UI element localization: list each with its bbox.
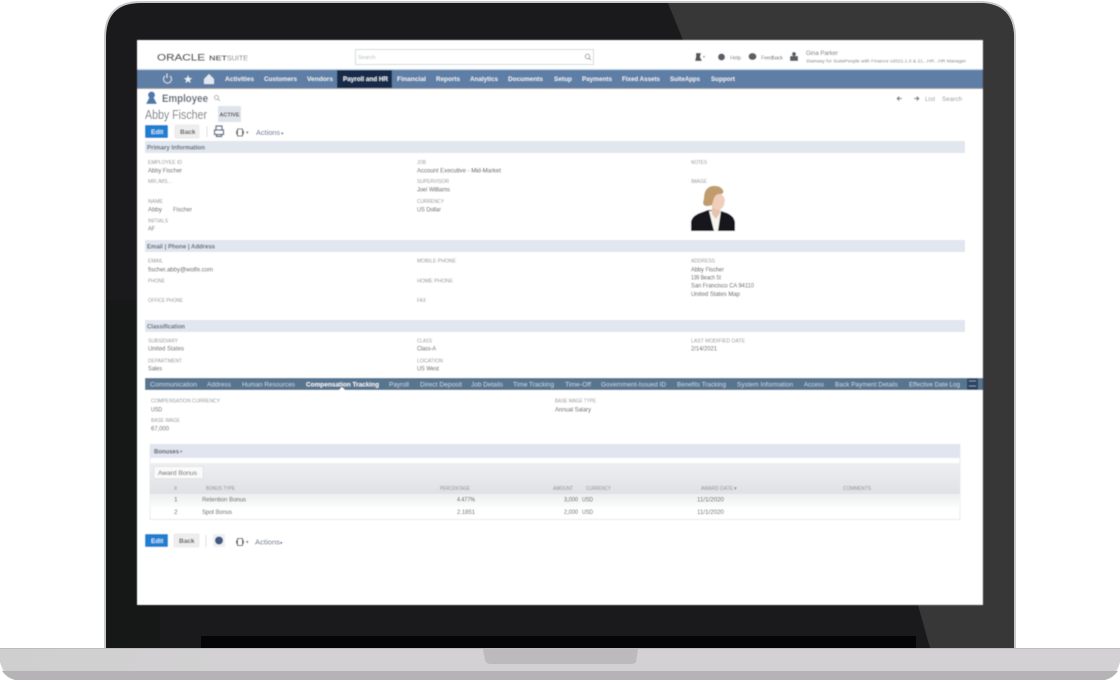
logo: Oracle NetSuite xyxy=(157,52,248,64)
button: award bonus: Award Bonus xyxy=(158,470,198,477)
navigation bar: Payroll and HR xyxy=(343,76,388,83)
table header: COMMENTS xyxy=(843,486,871,492)
top action buttons: ▾ xyxy=(281,131,284,137)
table header: AWARD DATE xyxy=(701,486,733,492)
table header xyxy=(174,486,871,492)
panel: classification: LAST MODIFIED DATE xyxy=(691,338,745,344)
table header: # xyxy=(174,486,178,492)
subtab bar: Job Details xyxy=(471,382,504,388)
bottom action buttons: Actions xyxy=(255,538,280,546)
nav icons: ★ xyxy=(183,74,193,86)
table row 2: 2 xyxy=(174,509,178,516)
bottom action buttons: ▾ xyxy=(246,540,249,546)
button: award bonus xyxy=(154,466,203,478)
panel: primary information: Fischer xyxy=(173,206,193,214)
panel: primary information: Joel Williams xyxy=(417,186,450,194)
top action buttons: Edit xyxy=(151,129,164,136)
icon: print xyxy=(214,126,224,136)
panel: classification: LOCATION xyxy=(417,358,443,364)
subtab bar: Access xyxy=(804,382,825,388)
panel: primary information: Abby Fischer xyxy=(148,168,183,174)
panel: email, phone and address: fischer.abby@wolfe.com xyxy=(148,266,213,274)
navigation bar: Financial xyxy=(397,76,426,83)
laptop: lid and bezel xyxy=(104,1,1016,650)
panel: classification: DEPARTMENT xyxy=(148,358,183,364)
top action buttons xyxy=(145,125,284,138)
subtab bar: Time-Off xyxy=(565,382,591,388)
table row 2: USD xyxy=(582,509,593,516)
image: employee photo xyxy=(691,186,735,231)
panel: email, phone and address: Abby Fischer xyxy=(691,266,725,274)
panel: primary information: US Dollar xyxy=(417,206,442,214)
panel: classification: Classification xyxy=(147,324,185,330)
panel: classification: United States xyxy=(148,346,184,352)
subtab bar xyxy=(145,378,983,390)
subtab bar: Effective Date Log xyxy=(909,382,960,388)
logo: Oracle NetSuite: SUITE xyxy=(227,54,248,62)
navigation links: List xyxy=(925,97,935,103)
panel: primary information: SUPERVISOR xyxy=(417,179,449,185)
page title block: ACTIVE xyxy=(220,112,240,118)
header utilities: Stairway for SuitePeople with Finance v2021.1.0 & 21...HR...HR Manager xyxy=(806,58,966,64)
navigation bar: Documents xyxy=(508,76,543,83)
top action buttons: Actions xyxy=(256,130,281,137)
table row 2: 2.1851 xyxy=(457,509,475,516)
panel: email, phone and address xyxy=(145,240,965,304)
table header: PERCENTAGE xyxy=(440,486,470,492)
bottom action buttons xyxy=(145,534,283,547)
navigation bar: Payments xyxy=(582,76,612,83)
panel: primary information: EMPLOYEE ID xyxy=(148,160,182,166)
panel: primary information: Primary Information xyxy=(147,144,205,152)
panel: bonuses table: ▾ xyxy=(180,449,183,454)
table row 1: Retention Bonus xyxy=(202,496,246,504)
subtab bar: Address xyxy=(207,382,232,388)
search box: Search xyxy=(358,55,375,61)
panel: compensation fields: 67,000 xyxy=(151,426,169,432)
subtab bar: System Information xyxy=(737,382,793,388)
table row 1: 11/1/2020 xyxy=(697,496,724,504)
panel: email, phone and address: MOBILE PHONE xyxy=(417,258,456,264)
bottom action buttons: Back xyxy=(179,538,195,545)
screen: NetSuite employee record xyxy=(137,40,983,605)
navigation bar: Activities xyxy=(225,76,254,83)
subtab bar: Communication xyxy=(150,382,197,388)
panel: primary information: IMAGE xyxy=(691,179,707,185)
panel: primary information: MR./MS... xyxy=(148,179,172,185)
panel: primary information: NAME xyxy=(148,199,163,205)
header utilities xyxy=(695,50,966,64)
table row 1 xyxy=(174,496,724,504)
panel: compensation fields xyxy=(151,398,596,432)
navigation bar: Analytics xyxy=(470,76,498,83)
nav icons xyxy=(164,74,214,86)
panel: email, phone and address: 139 Beach St xyxy=(691,274,721,282)
navigation bar: Reports xyxy=(436,76,460,83)
laptop: base xyxy=(0,648,1120,680)
subtab bar: Compensation Tracking xyxy=(306,382,379,388)
navigation links: Search xyxy=(942,97,962,103)
header utilities: ▾ xyxy=(703,54,705,59)
panel: classification: SUBSIDIARY xyxy=(148,338,178,344)
panel: classification: CLASS xyxy=(417,338,432,344)
panel: bonuses table: Bonuses xyxy=(154,448,179,456)
panel: primary information: JOB xyxy=(417,160,426,166)
bottom action buttons: ▾ xyxy=(280,540,283,546)
navigation links xyxy=(897,96,962,103)
icon: employee xyxy=(146,92,157,104)
bottom action buttons: Edit xyxy=(151,538,164,545)
top action buttons: Back xyxy=(180,129,196,136)
table header: ▾ xyxy=(734,486,737,492)
header utilities: Gina Parker xyxy=(806,50,839,57)
page title block xyxy=(145,92,962,122)
navigation bar: SuiteApps xyxy=(670,76,700,83)
panel: compensation fields: BASE WAGE TYPE xyxy=(555,398,596,404)
panel: primary information: NOTES xyxy=(691,160,707,166)
panel: classification: US West xyxy=(417,366,439,372)
subtab bar: Back Payment Details xyxy=(835,382,899,388)
panel: email, phone and address: FAX xyxy=(417,298,426,304)
panel: email, phone and address: Email | Phone | Address xyxy=(147,244,216,250)
table row 1: 1 xyxy=(174,496,178,504)
panel: primary information: Account Executive - Mid-Market xyxy=(417,168,501,174)
panel: primary information: CURRENCY xyxy=(417,199,444,205)
panel: email, phone and address: EMAIL xyxy=(148,258,163,264)
table row 2: 11/1/2020 xyxy=(697,509,724,516)
header utilities: Feedback xyxy=(761,56,783,62)
navigation bar: Customers xyxy=(264,76,297,83)
panel: compensation fields: Annual Salary xyxy=(555,406,592,414)
panel: primary information: Abby xyxy=(148,206,163,214)
panel: primary information: INITIALS xyxy=(148,218,168,224)
panel: classification: 2/14/2021 xyxy=(691,346,717,352)
navigation bar: Setup xyxy=(554,76,572,83)
panel: email, phone and address: OFFICE PHONE xyxy=(148,298,183,304)
panel: compensation fields: COMPENSATION CURRENCY xyxy=(151,398,220,404)
top header: logo, search and user xyxy=(157,50,966,64)
icon: actions refresh xyxy=(236,538,244,546)
panel: classification xyxy=(145,320,965,372)
panel: primary information: AF xyxy=(148,226,155,232)
table row 1: USD xyxy=(582,496,593,504)
table row 2: Spot Bonus xyxy=(202,509,232,516)
table row 1: 4.477% xyxy=(457,496,475,504)
panel: compensation fields: BASE WAGE xyxy=(151,418,180,424)
search box xyxy=(356,50,594,64)
panel: bonuses table xyxy=(150,444,960,520)
page title block: Employee xyxy=(162,93,208,105)
header utilities: Help xyxy=(730,56,741,62)
panel: email, phone and address: HOME PHONE xyxy=(417,278,453,284)
panel: email, phone and address: United States Map xyxy=(691,291,740,298)
table header: AMOUNT xyxy=(553,486,573,492)
subtab bar: Human Resources xyxy=(242,382,296,388)
logo: Oracle NetSuite: ORACLE xyxy=(157,52,205,64)
subtab bar: Direct Deposit xyxy=(420,382,462,388)
table header: CURRENCY xyxy=(586,486,611,492)
subtab bar: Government-Issued ID xyxy=(601,382,666,388)
logo: Oracle NetSuite: NET xyxy=(209,54,228,62)
navigation bar: Support xyxy=(711,76,736,83)
panel: email, phone and address: PHONE xyxy=(148,278,165,284)
table row 2 xyxy=(174,509,724,516)
page title block: Abby Fischer xyxy=(145,108,207,122)
subtab bar: Payroll xyxy=(389,382,409,388)
panel: compensation fields: USD xyxy=(151,406,162,414)
table row 1: 3,000 xyxy=(564,496,578,504)
icon: actions refresh xyxy=(236,129,244,136)
subtab bar: Time Tracking xyxy=(513,382,554,388)
icon: print xyxy=(213,534,225,547)
panel: email, phone and address: San Francisco CA 94110 xyxy=(691,282,754,290)
panel: classification: Sales xyxy=(148,366,162,372)
navigation bar xyxy=(137,69,983,89)
navigation bar: Vendors xyxy=(307,76,333,83)
table header: BONUS TYPE xyxy=(206,486,235,492)
navigation bar: Fixed Assets xyxy=(622,76,660,83)
top action buttons: ▾ xyxy=(246,130,249,136)
panel: email, phone and address: ADDRESS xyxy=(691,258,715,264)
subtab bar: Benefits Tracking xyxy=(677,382,726,388)
panel: primary information xyxy=(145,141,965,232)
table row 2: 2,000 xyxy=(564,509,578,516)
panel: classification: Class-A xyxy=(417,346,437,352)
